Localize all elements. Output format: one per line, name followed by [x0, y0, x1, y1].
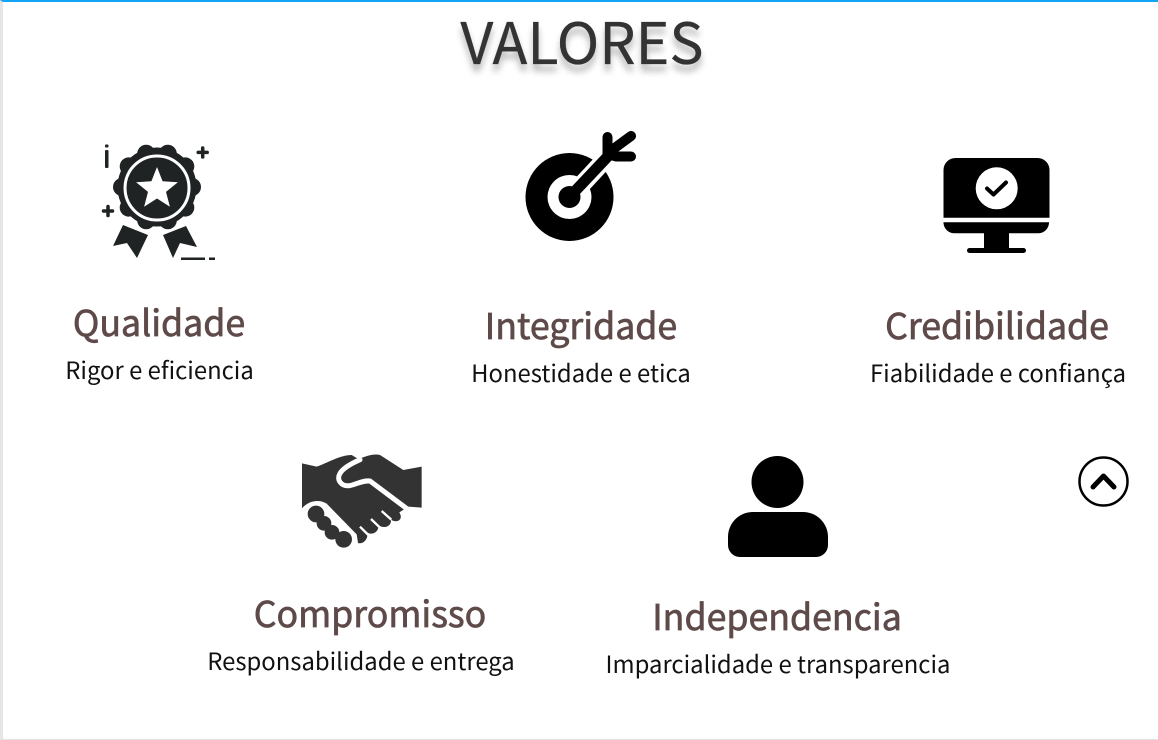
heading: Qualidade: Qualidade [73, 296, 245, 347]
text: Honestidade e etica: Honestidade e etica [471, 354, 691, 388]
text: Rigor e eficiencia: Rigor e eficiencia [65, 350, 254, 386]
icon: monitor with check mark [944, 158, 1050, 253]
heading: Compromisso: Compromisso [254, 587, 486, 638]
title: VALORES [460, 0, 704, 81]
icon: person [728, 456, 828, 557]
heading: Independencia: Independencia [652, 590, 902, 641]
icon: scroll to top button [1080, 458, 1128, 506]
heading: Credibilidade: Credibilidade [885, 299, 1109, 350]
icon: target with arrow [526, 136, 631, 241]
icon: handshake [302, 455, 422, 552]
text: Responsabilidade e entrega: Responsabilidade e entrega [207, 642, 515, 676]
text: Imparcialidade e transparencia: Imparcialidade e transparencia [606, 644, 950, 680]
heading: Integridade: Integridade [485, 299, 677, 350]
text: Fiabilidade e confiança: Fiabilidade e confiança [870, 354, 1126, 388]
